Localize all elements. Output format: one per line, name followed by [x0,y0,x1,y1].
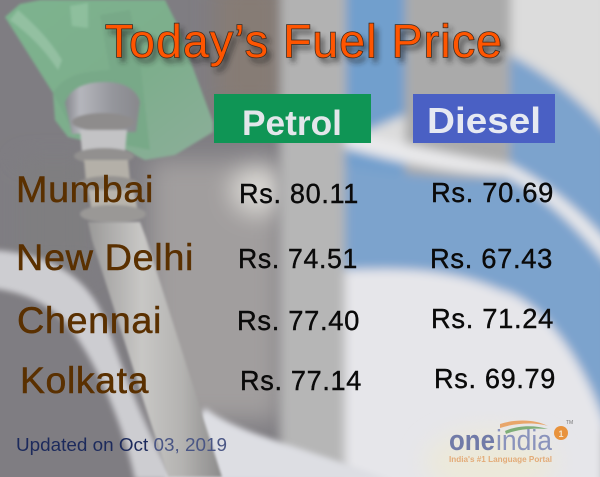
oneindia logo: india [496,425,553,457]
diesel prices: Rs. 67.43 [430,243,553,274]
metal collar and rings [65,82,146,223]
metal spout tube [88,222,222,477]
oneindia logo: TM [566,420,573,426]
column header: Petrol: Petrol [242,104,342,143]
city labels: New Delhi [16,237,194,278]
city labels: Chennai [17,300,162,341]
diesel prices: Rs. 70.69 [431,177,554,208]
update date note: Updated on Oct 03, 2019 [16,435,227,455]
green nozzle handle [5,0,213,160]
column header: Diesel: Diesel [427,100,541,141]
city labels: Mumbai [16,169,154,210]
city labels: Kolkata [20,360,149,401]
petrol prices [237,178,362,396]
diesel prices: Rs. 69.79 [434,363,556,394]
petrol prices: Rs. 74.51 [238,243,358,274]
petrol prices: Rs. 77.40 [237,305,360,336]
city labels [16,169,194,401]
diesel prices [430,177,556,394]
oneindia logo: India's #1 Language Portal [449,454,552,464]
hose curves [0,250,395,477]
petrol prices: Rs. 80.11 [239,178,359,209]
column header: Petrol [214,94,371,143]
oneindia logo [449,420,573,464]
column header: Diesel [413,94,555,143]
title: Today’s Fuel Price [109,20,507,72]
oneindia logo: 1 [558,429,564,439]
diesel prices: Rs. 71.24 [431,303,554,334]
petrol prices: Rs. 77.14 [240,365,362,396]
oneindia logo: one [449,425,495,457]
title: Today’s Fuel Price [105,15,503,67]
